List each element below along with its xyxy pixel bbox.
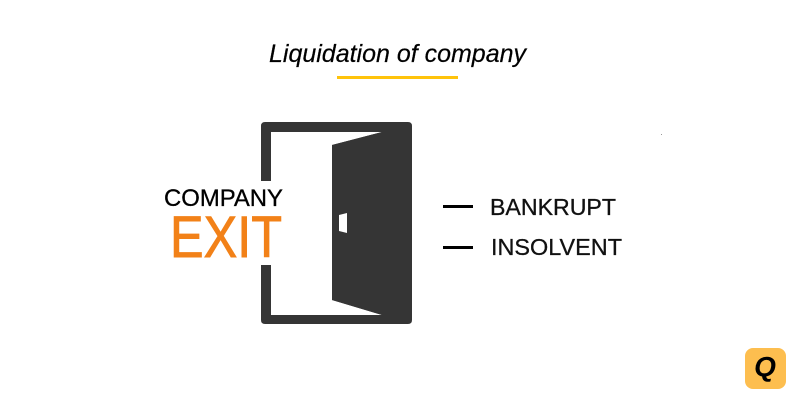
logo badge xyxy=(745,348,786,389)
icon: open door xyxy=(261,122,412,324)
dash xyxy=(443,246,473,249)
list item: insolvent: INSOLVENT xyxy=(491,234,622,260)
title underline xyxy=(337,76,458,79)
badge letter: Q xyxy=(754,351,776,382)
title: Liquidation of company xyxy=(269,40,527,68)
door leaf xyxy=(332,132,412,315)
exit label: EXIT xyxy=(170,205,282,270)
list item: bankrupt: BANKRUPT xyxy=(490,194,616,220)
speck xyxy=(661,134,662,135)
door handle window xyxy=(339,213,347,233)
door frame xyxy=(261,122,412,324)
dash xyxy=(443,205,473,208)
company label: COMPANY xyxy=(164,185,283,212)
badge background xyxy=(745,348,786,389)
